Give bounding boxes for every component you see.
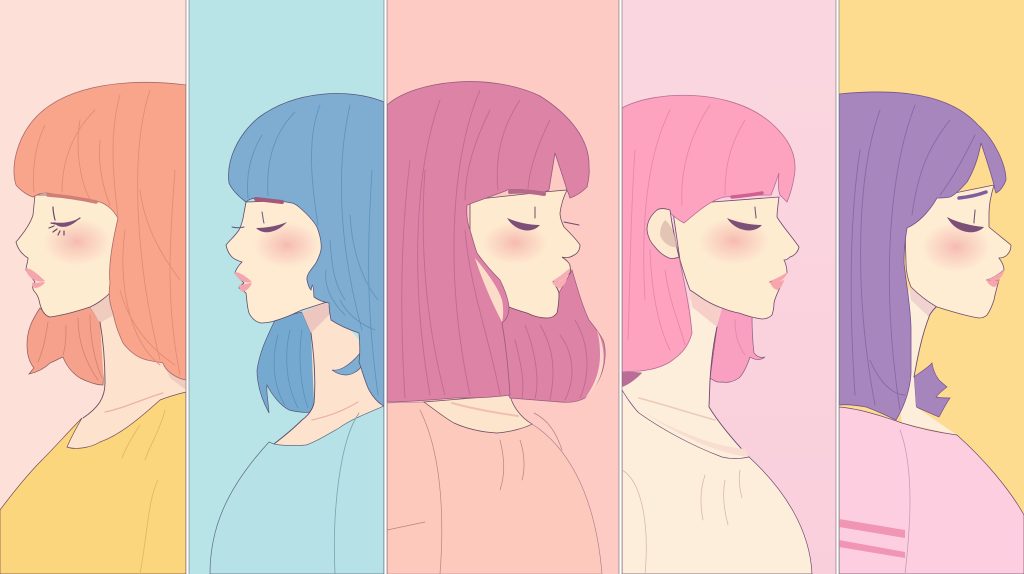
eyebrow shade [732, 193, 762, 197]
hair strands [851, 105, 975, 410]
eyebrow shade [510, 192, 544, 194]
blush [698, 217, 770, 265]
lips [26, 268, 45, 288]
hair [839, 92, 1006, 420]
neck [274, 302, 384, 446]
upper hair [14, 82, 186, 380]
lower hair behind neck [27, 307, 105, 385]
back hair [490, 270, 605, 402]
face [672, 197, 799, 319]
panel: blue-haired woman [189, 0, 384, 574]
blush [260, 226, 314, 264]
face [16, 195, 122, 317]
right hair flick [710, 305, 765, 382]
lips [552, 268, 570, 288]
shirt [839, 407, 1024, 574]
eyebrow shade [256, 199, 282, 202]
shirt [622, 390, 812, 574]
hair [622, 95, 795, 372]
closed eye [256, 222, 287, 232]
hair strands [402, 90, 587, 400]
panel dividers [186, 0, 839, 574]
panel: rose-haired woman [387, 0, 619, 574]
hair shade [622, 372, 642, 387]
closed eye [507, 218, 540, 230]
lips [987, 270, 1004, 287]
neck sliver [475, 258, 503, 322]
closed eye [49, 207, 80, 235]
closed eye [947, 217, 984, 232]
face [226, 200, 330, 323]
panel: coral-haired woman [0, 0, 186, 574]
shirt [0, 392, 186, 574]
icon: ear [647, 208, 679, 258]
hair sliver [585, 330, 604, 398]
neck [424, 395, 532, 433]
neck [900, 287, 957, 435]
hair strands [33, 90, 180, 375]
lips [770, 272, 787, 290]
right hair flick [332, 353, 361, 376]
shirt [210, 406, 384, 574]
hair strands [628, 105, 745, 355]
eyebrow shade [48, 195, 96, 202]
shirt [387, 402, 602, 574]
shirt stripes [839, 519, 905, 558]
front hair [387, 82, 589, 402]
panel: pink-haired woman [622, 0, 836, 574]
hair flick behind neck [914, 363, 950, 417]
closed eye [727, 218, 762, 230]
face [905, 185, 1011, 318]
lips [235, 272, 252, 292]
panel: purple-haired woman [839, 0, 1024, 574]
lower hair behind neck [257, 312, 316, 413]
blush [49, 222, 105, 262]
eyebrow shade [959, 192, 986, 198]
upper hair [229, 94, 384, 406]
blush [922, 222, 990, 272]
blush [488, 225, 542, 261]
face [470, 190, 580, 318]
neck [622, 300, 749, 459]
hair strands [248, 105, 378, 395]
neck [68, 307, 186, 448]
